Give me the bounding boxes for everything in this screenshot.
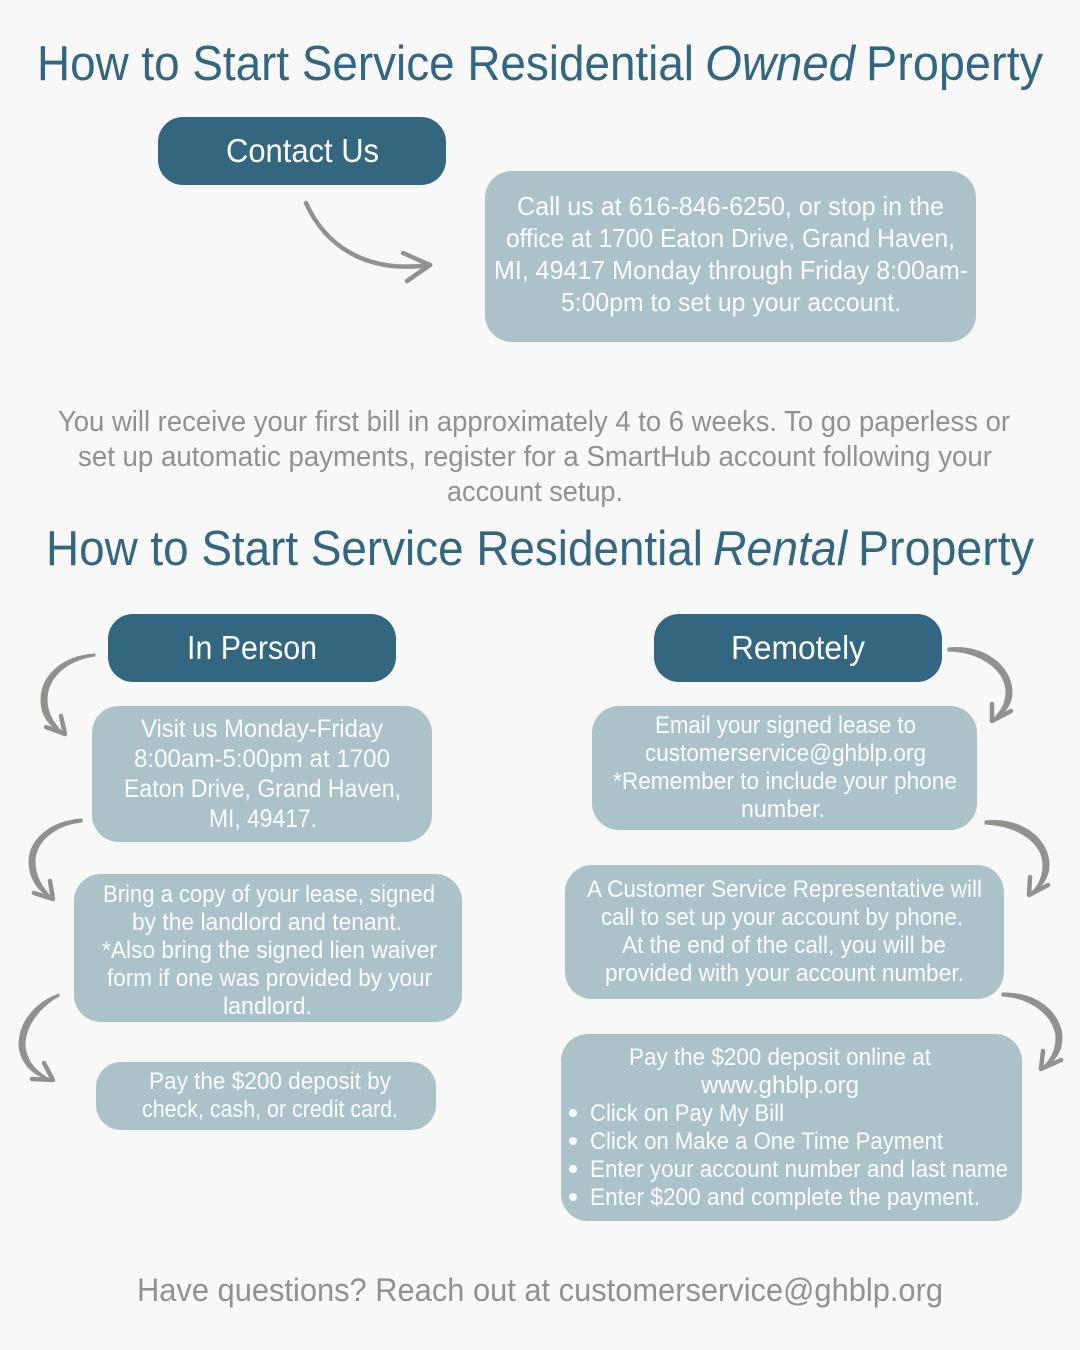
panel: pay deposit in person xyxy=(96,1062,436,1130)
panel: bring lease: form if one was provided by your xyxy=(107,965,432,992)
text block: first bill note: set up automatic payments, register for a SmartHub account following your xyxy=(78,441,992,473)
panel: pay deposit online xyxy=(561,1034,1022,1221)
footer: contact line: Have questions? Reach out at customerservice@ghblp.org xyxy=(137,1272,943,1308)
title: rental property: Rental xyxy=(713,522,848,576)
arrow: visit to bring lease xyxy=(29,819,82,899)
button: contact us: Contact Us xyxy=(226,132,379,169)
button: remotely: Remotely xyxy=(731,629,865,666)
panel: customer service call: At the end of the call, you will be xyxy=(622,932,946,959)
panel: email lease: number. xyxy=(741,796,825,823)
panel: email lease xyxy=(592,706,977,830)
title: rental property: How to Start Service Residential xyxy=(46,522,703,576)
panel: customer service call: provided with your account number. xyxy=(605,960,964,987)
panel: call us: office at 1700 Eaton Drive, Grand Haven, xyxy=(506,223,955,253)
panel: pay deposit online: Click on Make a One Time Payment xyxy=(590,1128,943,1155)
button: in person xyxy=(108,614,396,682)
panel: bring lease: by the landlord and tenant. xyxy=(132,909,402,936)
panel: customer service call: call to set up your account by phone. xyxy=(601,904,963,931)
panel: visit us: MI, 49417. xyxy=(209,805,317,833)
title: owned property: Property xyxy=(866,37,1043,91)
text block: first bill note: You will receive your first bill in approximately 4 to 6 weeks. To go paperless or xyxy=(58,406,1010,438)
button: in person: In Person xyxy=(187,629,317,666)
panel: bring lease: Bring a copy of your lease, signed xyxy=(103,881,435,908)
panel: pay deposit online: Pay the $200 deposit online at xyxy=(629,1044,931,1071)
panel: customer service call: A Customer Service Representative will xyxy=(587,876,982,903)
arrow: bring lease to deposit xyxy=(19,994,59,1080)
title: owned property: Owned xyxy=(705,37,857,91)
panel: visit us: Eaton Drive, Grand Haven, xyxy=(124,775,401,803)
panel: pay deposit online: Enter your account number and last name xyxy=(590,1156,1008,1183)
title: owned property xyxy=(37,37,1043,91)
panel: email lease: Email your signed lease to xyxy=(655,712,916,739)
panel: pay deposit online: Click on Pay My Bill xyxy=(590,1100,784,1127)
panel: call us: 5:00pm to set up your account. xyxy=(561,287,901,317)
panel: call us: MI, 49417 Monday through Friday 8:00am- xyxy=(494,255,968,285)
panel: call us: Call us at 616-846-6250, or stop in the xyxy=(517,191,944,221)
text block: first bill note: account setup. xyxy=(447,476,623,508)
button: remotely xyxy=(654,614,942,682)
button: contact us xyxy=(158,117,446,185)
arrow: representative to payment xyxy=(1002,993,1062,1069)
panel: email lease: *Remember to include your phone xyxy=(613,768,957,795)
arrow: in person to visit xyxy=(41,654,95,734)
title: rental property: Property xyxy=(858,522,1034,576)
arrow: email to representative xyxy=(985,821,1049,895)
panel: visit us: 8:00am-5:00pm at 1700 xyxy=(134,745,390,773)
arrow: contact us to call box xyxy=(306,203,430,281)
panel: bring lease xyxy=(74,874,462,1022)
panel: email lease: customerservice@ghblp.org xyxy=(645,740,926,767)
arrow: remotely to email xyxy=(948,648,1012,721)
title: owned property: How to Start Service Residential xyxy=(37,37,694,91)
panel: call us xyxy=(485,171,976,342)
panel: bring lease: *Also bring the signed lien waiver xyxy=(102,937,437,964)
panel: pay deposit online: www.ghblp.org xyxy=(700,1072,859,1099)
panel: pay deposit online: Enter $200 and complete the payment. xyxy=(590,1184,980,1211)
panel: pay deposit in person: check, cash, or credit card. xyxy=(142,1096,398,1123)
text block: first bill note xyxy=(58,406,1010,508)
panel: bring lease: landlord. xyxy=(223,993,312,1020)
panel: visit us: Visit us Monday-Friday xyxy=(141,715,383,743)
panel: customer service call xyxy=(565,865,1004,999)
panel: pay deposit in person: Pay the $200 deposit by xyxy=(149,1068,392,1095)
panel: visit us xyxy=(92,706,432,842)
